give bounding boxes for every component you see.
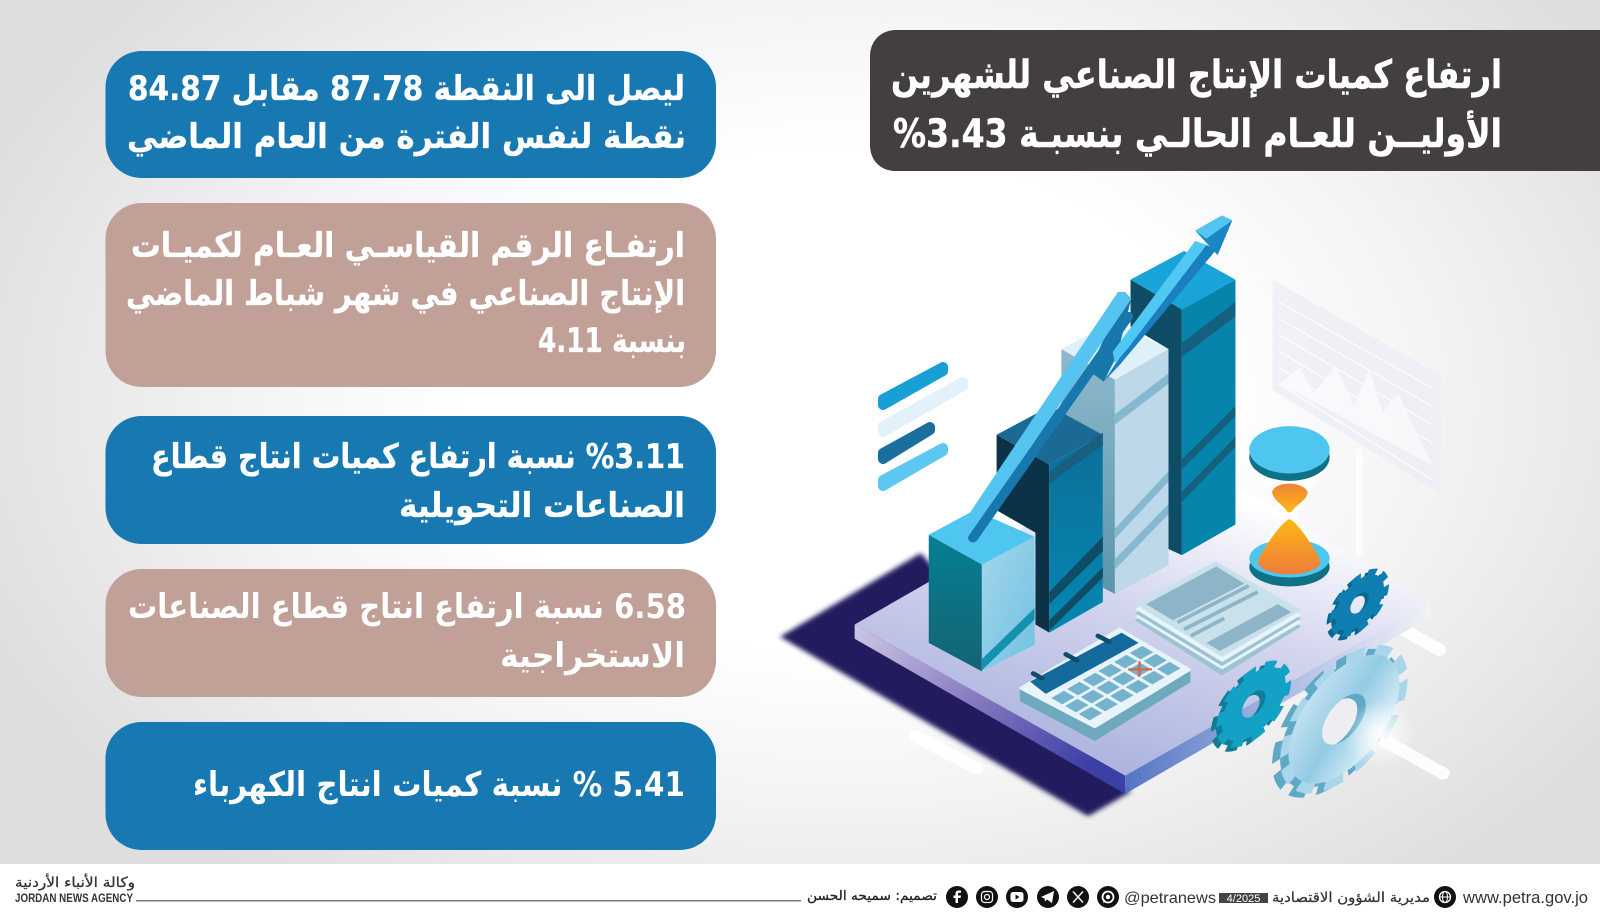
icon: globe [1434, 886, 1456, 908]
panel: general index [106, 203, 716, 387]
date badge: 4/2025 [1227, 893, 1260, 905]
icon: youtube [1006, 886, 1028, 908]
illustration: isometric growth chart [780, 216, 1443, 817]
agency logo: وكالة الأنباء الأردنية [15, 873, 135, 891]
text line: 6.58 نسبة ارتفاع انتاج قطاع الصناعات [128, 587, 686, 627]
title panel [870, 30, 1600, 171]
bar 3 light [1061, 322, 1168, 594]
panel: extractive [106, 569, 716, 697]
agency logo [15, 873, 135, 905]
text line: نقطة لنفس الفترة من العام الماضي [127, 117, 686, 157]
text line: %3.11 نسبة ارتفاع كميات انتاج قطاع [151, 437, 685, 477]
calculator / calendar [1021, 629, 1189, 740]
bar 1 front [929, 510, 1035, 671]
website: www.petra.gov.jo [1462, 889, 1588, 907]
text line: الصناعات التحويلية [399, 486, 685, 526]
title line 2: الأوليــن للعـام الحالـي بنسبـة 3.43% [893, 109, 1502, 157]
panel: index point [106, 51, 716, 178]
agency logo: JORDAN NEWS AGENCY [15, 891, 133, 905]
small gear top right [1330, 562, 1385, 647]
text line: بنسبة 4.11 [538, 321, 686, 361]
text line: 5.41 % نسبة كميات انتاج الكهرباء [193, 765, 685, 805]
social handle: @petranews [1124, 890, 1216, 907]
text line: ارتفـاع الرقم القياسـي العـام لكميـات [131, 226, 685, 266]
footer [0, 864, 1600, 917]
decorative white streaks [916, 624, 1443, 773]
bar 2 dark [997, 406, 1103, 633]
large light gear [1278, 626, 1416, 817]
department name: مديرية الشؤون الاقتصادية [1272, 890, 1430, 906]
panel: manufacturing [106, 416, 716, 544]
stack of papers [1135, 561, 1301, 676]
faint chart board [1273, 280, 1441, 555]
date badge [1219, 893, 1268, 905]
hourglass [1249, 426, 1330, 587]
icon: X [1067, 886, 1089, 908]
bar 4 tallest [1131, 251, 1235, 555]
icon: facebook [946, 886, 968, 908]
text line: الاستخراجية [500, 636, 685, 676]
panel: electricity [106, 722, 716, 850]
text line: ليصل الى النقطة 87.78 مقابل 84.87 [128, 69, 685, 109]
icon: whatsapp [1097, 886, 1119, 908]
icon: instagram [976, 886, 998, 908]
text line: الإنتاج الصناعي في شهر شباط الماضي [126, 274, 685, 314]
floating stripes [883, 367, 963, 486]
platform shadow [780, 553, 1131, 816]
icon: telegram [1037, 886, 1059, 908]
designer credit: تصميم: سميحه الحسن [807, 889, 937, 904]
medium gear [1216, 651, 1286, 761]
platform [855, 461, 1431, 794]
rising arrow [960, 216, 1232, 540]
